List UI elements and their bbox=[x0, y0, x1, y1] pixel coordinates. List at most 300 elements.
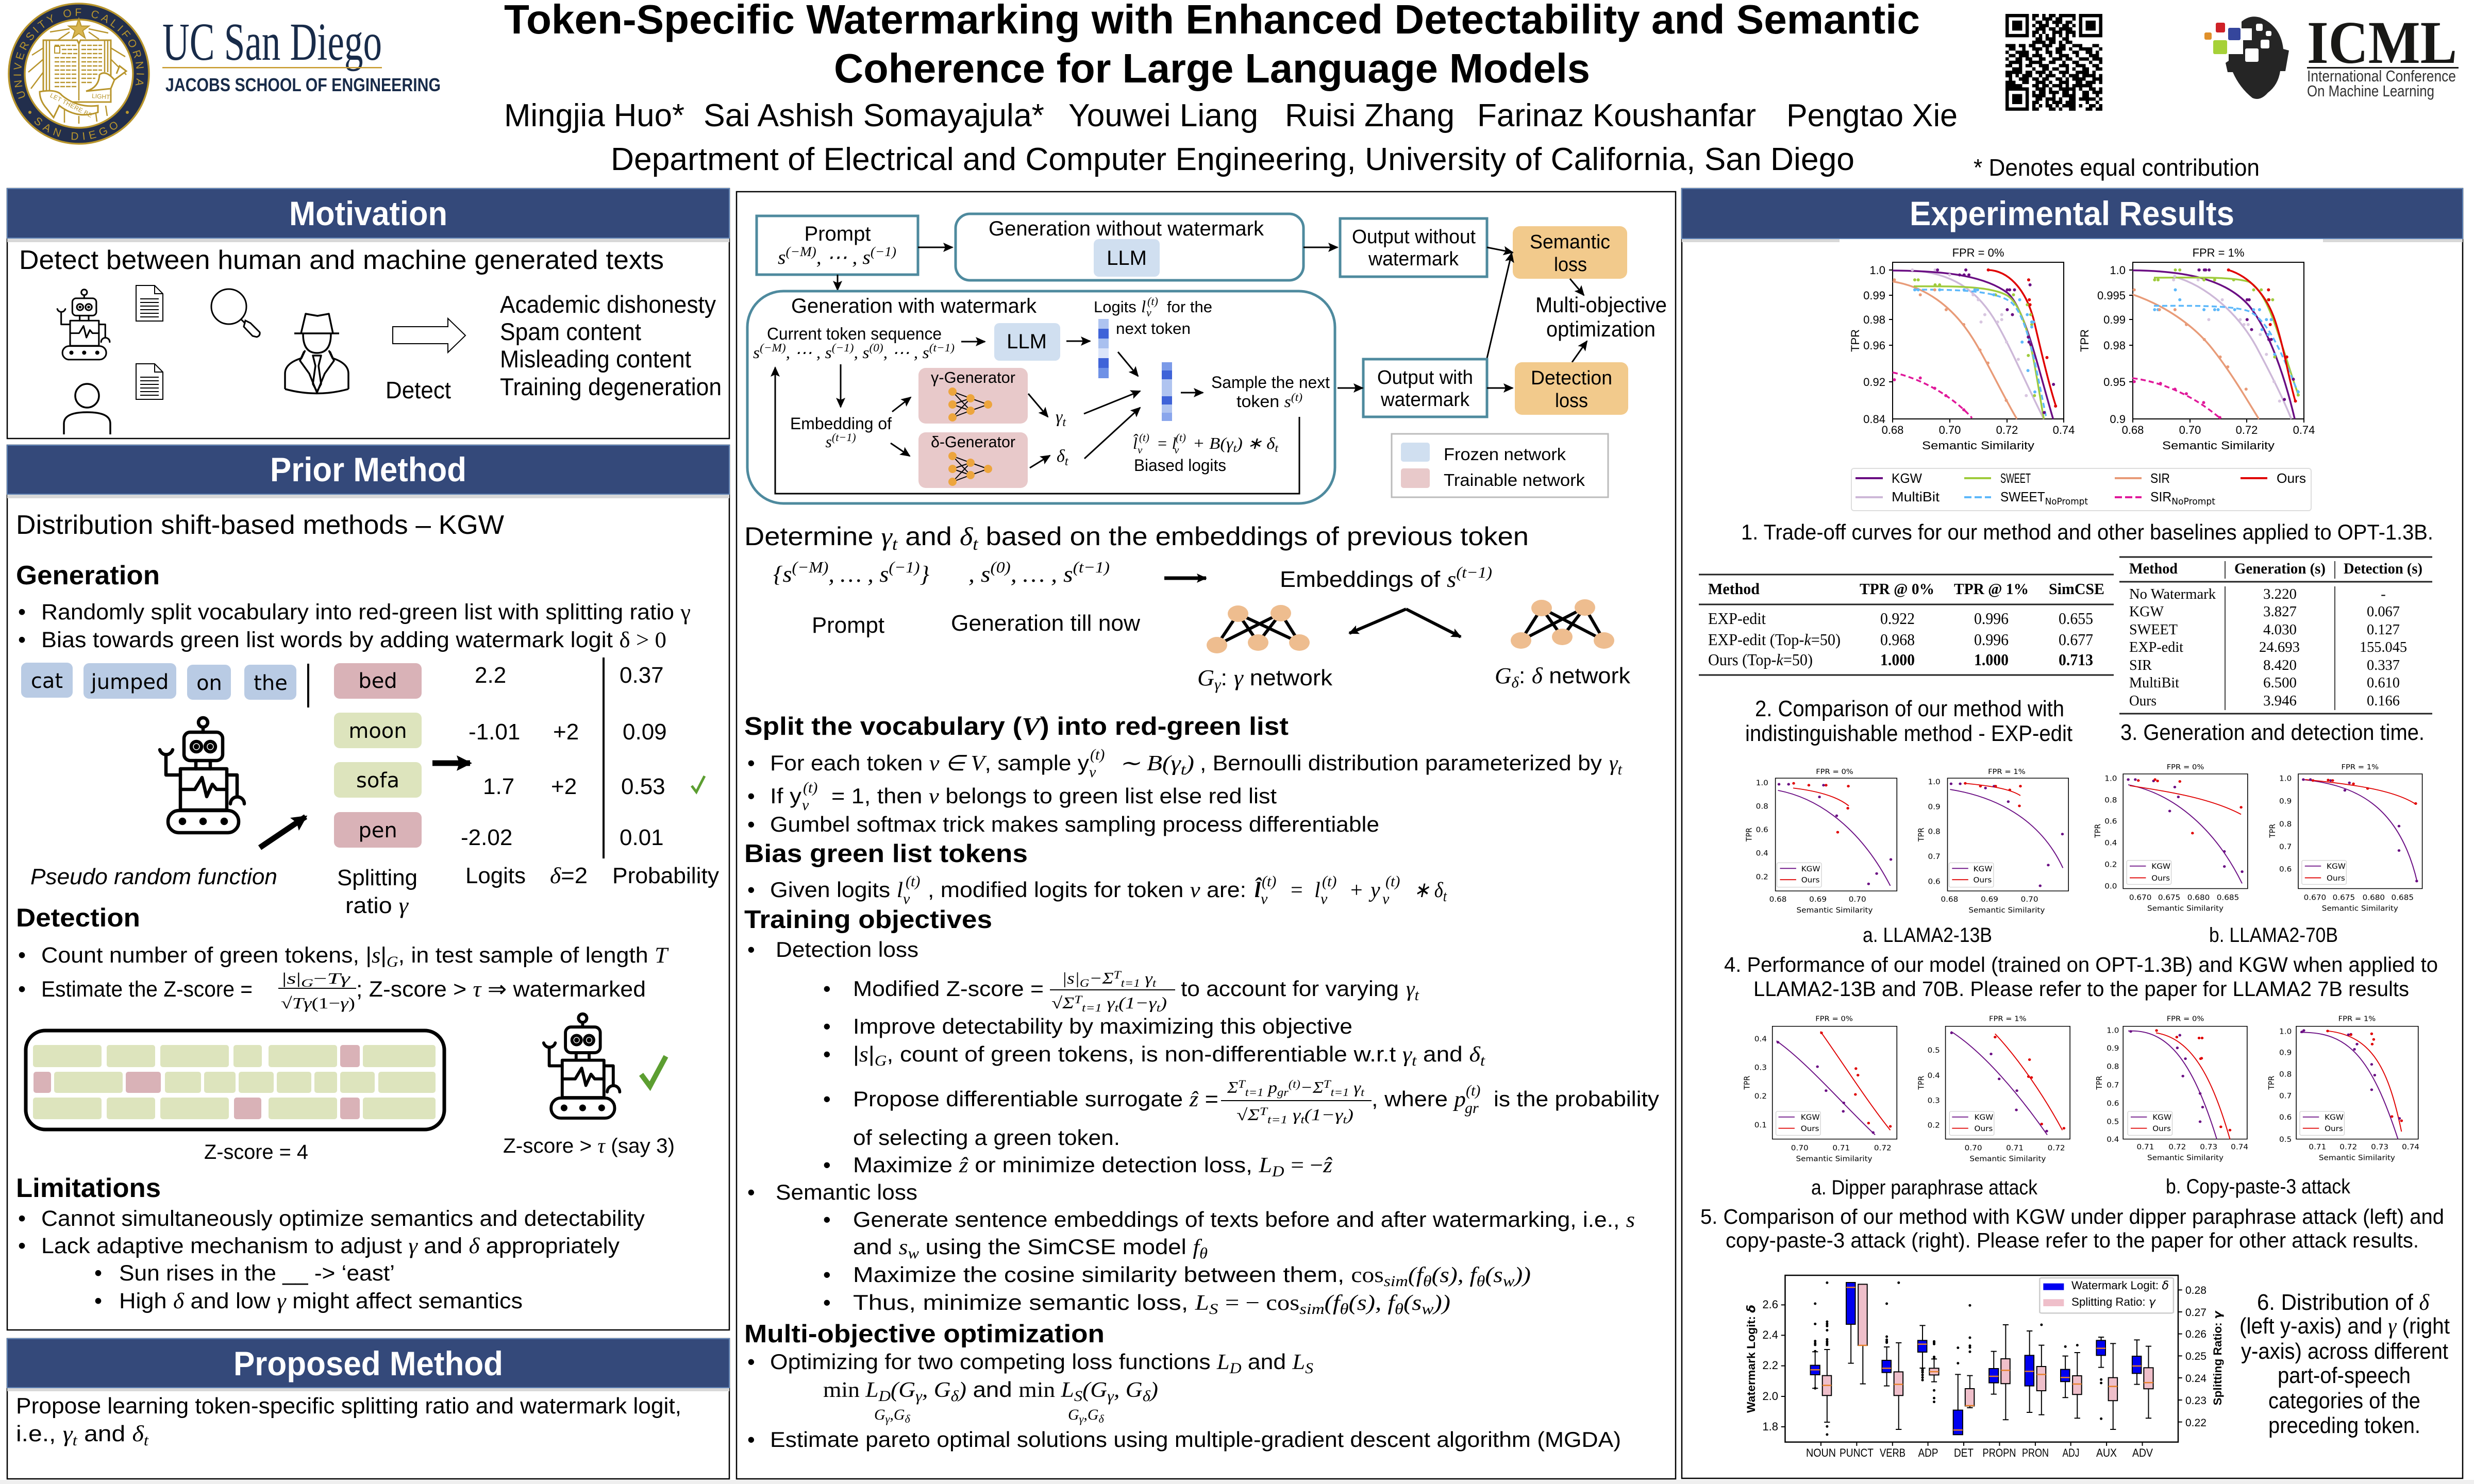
table: generation and detection time: SWEET bbox=[2129, 621, 2178, 638]
affiliation: Department of Electrical and Computer Engineering, University of California, San Diego bbox=[611, 142, 1854, 177]
chart: tradeoff FPR 1: 0.70 bbox=[2179, 424, 2201, 436]
chart: tradeoff FPR 0: Semantic Similarity bbox=[1922, 439, 2034, 452]
chart: LLAMA2-13B FPR 0: Ours bbox=[1801, 876, 1819, 885]
section: training objectives, detection loss: • bbox=[823, 976, 831, 1001]
probability column: 0.53 bbox=[621, 774, 665, 799]
text: multi-objective optimization bbox=[1535, 293, 1667, 341]
arrow: sequence to embedding bbox=[840, 364, 841, 407]
section: training objectives, detection loss: Modified Z-score = bbox=[853, 976, 1044, 1001]
chart: Dipper FPR 1: 0.72 bbox=[2048, 1144, 2065, 1152]
chart: Dipper FPR 1: 0.4 bbox=[1928, 1072, 1940, 1080]
chart: LLAMA2-70B FPR 0: 0.4 bbox=[2104, 839, 2117, 847]
chart: distribution boxplot: 1.8 bbox=[1762, 1420, 1778, 1433]
chart: LLAMA2-13B FPR 0: 0.4 bbox=[1756, 849, 1768, 858]
heading: Proposed Method bbox=[7, 1339, 729, 1388]
section: split the vocabulary: Gumbel softmax trick makes sampling process differentiable bbox=[770, 812, 1379, 836]
chart: Copy-paste FPR 1: 0.7 bbox=[2279, 1092, 2292, 1100]
list: consequences: Academic dishonesty bbox=[500, 291, 716, 318]
chart: tradeoff FPR 1: 0.68 bbox=[2122, 424, 2144, 436]
chart: distribution boxplot: Splitting Ratio: γ bbox=[2071, 1295, 2156, 1309]
caption 5: copy-paste-3 attack (right). Please refer to the paper for other attack results. bbox=[1726, 1228, 2419, 1252]
legend: network types: Frozen network bbox=[1444, 445, 1566, 464]
section: multi-objective optimization: Estimate pareto optimal solutions using multiple-gradient descent algorithm (MGDA) bbox=[770, 1427, 1621, 1452]
chart: LLAMA2-13B FPR 1: 0.70 bbox=[2021, 896, 2038, 904]
table: comparison with EXP-edit: 0.655 bbox=[2059, 609, 2093, 628]
icon: detective bbox=[285, 314, 348, 394]
section: semantic loss: Maximize the cosine similarity between them, cossim(fθ(s), f θ(sw)) bbox=[853, 1262, 1531, 1290]
section: split the vocabulary: Split the vocabulary ( V) into red-green list bbox=[744, 712, 1289, 740]
box: prompt bbox=[757, 216, 918, 275]
chart: Copy-paste FPR 1: 0.72 bbox=[2339, 1143, 2357, 1152]
table: generation and detection time: 0.067 bbox=[2367, 603, 2400, 620]
label: gamma network: Gγ: γ network bbox=[1197, 665, 1333, 693]
labels under generation figure: Pseudo random function bbox=[30, 864, 277, 889]
chart: Copy-paste FPR 0: 0.73 bbox=[2200, 1143, 2217, 1152]
section: training objectives, detection loss: √Σ Tt=1 γt(1−γ t) bbox=[1236, 1105, 1353, 1126]
caption 5 bbox=[1700, 1205, 2444, 1252]
chart: LLAMA2-70B FPR 0 bbox=[2094, 763, 2248, 913]
section: bias green list tokens: l̂ bbox=[1255, 877, 1262, 902]
chart: distribution boxplot: 0.24 bbox=[2185, 1373, 2206, 1385]
table: comparison with EXP-edit: 0.996 bbox=[1974, 609, 2009, 628]
legend: methods: SIR bbox=[2150, 470, 2170, 486]
arrow: robot to tokens bbox=[260, 817, 306, 848]
section: training objectives, detection loss: √Σ Tt=1 γt(1−γ t) bbox=[1051, 993, 1167, 1014]
chart: Copy-paste FPR 0: 0.7 bbox=[2107, 1081, 2119, 1089]
text: proposal: i.e., γt and δt bbox=[16, 1421, 149, 1449]
box: output with watermark: watermark bbox=[1380, 389, 1470, 411]
labels under generation figure bbox=[30, 863, 719, 918]
bullets: detection: ; Z-score > τ ⇒ watermarked bbox=[356, 977, 646, 1002]
sublabels: attacks: b. Copy-paste-3 attack bbox=[2166, 1175, 2351, 1198]
section: bias green list tokens: + bbox=[1350, 879, 1363, 902]
chart: LLAMA2-70B FPR 1: 0.8 bbox=[2279, 820, 2292, 829]
chart: Dipper FPR 1: Ours bbox=[1975, 1125, 1993, 1133]
bullets: generation bbox=[18, 600, 691, 652]
chart: tradeoff FPR 0: 1.0 bbox=[1869, 264, 1885, 277]
formula: biased logits: l̂ bbox=[1133, 434, 1138, 452]
chart: Copy-paste FPR 0: KGW bbox=[2152, 1114, 2172, 1122]
arrow: prompt to generation bbox=[837, 275, 838, 290]
labels under generation figure: Logits bbox=[465, 863, 526, 888]
box: semantic loss: loss bbox=[1554, 254, 1587, 276]
chart: LLAMA2-70B FPR 1: 0.685 bbox=[2392, 893, 2414, 902]
section: training objectives, detection loss: γt bbox=[1406, 977, 1419, 1004]
section: bias green list tokens: (t) bbox=[1262, 873, 1276, 890]
section: bias green list tokens: v bbox=[1320, 890, 1328, 907]
section: semantic loss: Semantic loss bbox=[776, 1180, 917, 1204]
chart: Copy-paste FPR 1: 0.9 bbox=[2279, 1049, 2292, 1057]
section: split the vocabulary: • bbox=[747, 751, 755, 775]
bullets: detection: • bbox=[18, 977, 26, 1002]
section: training objectives, detection loss: Maximize ẑ or minimize detection loss, LD = −ẑ bbox=[853, 1153, 1333, 1180]
list: consequences: Misleading content bbox=[500, 345, 691, 373]
legend: methods: KGW bbox=[1892, 470, 1922, 486]
chart: tradeoff FPR 1: FPR = 1% bbox=[2193, 246, 2244, 259]
chart: LLAMA2-13B FPR 1 bbox=[1917, 768, 2068, 915]
sublabels: models bbox=[1863, 924, 2338, 947]
arrow: to sampling bbox=[1181, 392, 1203, 394]
chart: Dipper FPR 1 bbox=[1917, 1015, 2070, 1163]
logits column: 1.7 bbox=[483, 774, 514, 799]
vector: biased logits bbox=[1162, 362, 1172, 421]
chart: Copy-paste FPR 1: 0.74 bbox=[2402, 1143, 2419, 1152]
table: comparison with EXP-edit: 0.677 bbox=[2059, 630, 2093, 649]
section: multi-objective optimization: min LD(Gγ, Gδ) and min LS(Gγ, Gδ) bbox=[823, 1377, 1158, 1405]
section: training objectives, detection loss: is the probability bbox=[1494, 1087, 1659, 1111]
section: training objectives, detection loss: , where p bbox=[1372, 1087, 1466, 1111]
chart: LLAMA2-70B FPR 0: 0.2 bbox=[2104, 861, 2117, 869]
authors: Sai Ashish Somayajula* bbox=[704, 98, 1044, 133]
caption 6 bbox=[2239, 1290, 2450, 1438]
logo: UC San Diego seal: SAN DIEGO bbox=[35, 117, 118, 140]
title: Coherence for Large Language Models bbox=[834, 45, 1590, 91]
chart: Copy-paste FPR 1: KGW bbox=[2325, 1114, 2344, 1122]
chart: tradeoff FPR 0: 0.99 bbox=[1863, 289, 1885, 302]
logo: UC San Diego seal: UNIVERSITY OF CALIFORNIA bbox=[13, 8, 144, 99]
symbol: gamma t: γt bbox=[1056, 408, 1066, 429]
box: detection loss bbox=[1515, 362, 1628, 415]
label: logits bbox=[1094, 295, 1212, 338]
chart: LLAMA2-13B FPR 0: 0.70 bbox=[1849, 896, 1866, 904]
chart: Dipper FPR 0: TPR bbox=[1743, 1076, 1752, 1090]
delta additions: +2 bbox=[553, 719, 579, 745]
chart: distribution boxplot: Splitting Ratio: γ bbox=[2211, 1310, 2225, 1406]
section: bias green list tokens: v bbox=[903, 890, 910, 907]
heading: Prior Method: Prior Method bbox=[270, 450, 466, 488]
section: split the vocabulary: γt bbox=[1609, 752, 1623, 778]
caption 6: categories of the bbox=[2268, 1388, 2420, 1413]
label: logits: l bbox=[1141, 298, 1146, 316]
formula: biased logits: v bbox=[1174, 444, 1179, 456]
tokens: context: on bbox=[196, 671, 222, 695]
arrow: LLM to logits bbox=[1066, 340, 1090, 342]
chart: Copy-paste FPR 0: 0.74 bbox=[2231, 1143, 2248, 1152]
section: split the vocabulary: v bbox=[802, 797, 809, 814]
arrow: semantic loss to optimization bbox=[1570, 279, 1584, 295]
section: multi-objective optimization: Optimizing for two competing loss functions LD and LS bbox=[770, 1350, 1313, 1377]
table: generation and detection time: 155.045 bbox=[2360, 639, 2407, 655]
chart: tradeoff FPR 1: 0.9 bbox=[2110, 413, 2126, 426]
arrow: embedding to delta generator bbox=[891, 443, 910, 456]
chart: LLAMA2-70B FPR 1: KGW bbox=[2327, 863, 2346, 871]
vector: logits bbox=[1098, 319, 1109, 378]
labels under generation figure: Probability bbox=[612, 863, 719, 888]
arrow: tokens to logits bbox=[432, 761, 470, 766]
chart: tradeoff FPR 0: TPR bbox=[1849, 329, 1862, 352]
table: comparison with EXP-edit: TPR @ 0% bbox=[1860, 580, 1934, 598]
chart: tradeoff FPR 1: 0.995 bbox=[2097, 289, 2126, 302]
section: multi-objective optimization: Multi-objective optimization bbox=[744, 1320, 1105, 1348]
arrow: embedding to gamma generator bbox=[892, 397, 911, 412]
table: generation and detection time: EXP-edit bbox=[2129, 639, 2183, 655]
logo: ICML: ICML bbox=[2307, 9, 2457, 76]
section: semantic loss: Thus, minimize semantic loss, LS = − cos sim(fθ(s), f θ(sw)) bbox=[853, 1290, 1450, 1318]
chart: tradeoff FPR 1: 0.95 bbox=[2103, 376, 2126, 389]
label: delta network: Gδ: δ network bbox=[1495, 663, 1631, 691]
icon: magnifying glass bbox=[211, 289, 260, 337]
bullets: limitations: Sun rises in the __ -> ‘east’ bbox=[119, 1261, 395, 1286]
icon: gamma network bbox=[1207, 605, 1310, 653]
chart: tradeoff FPR 0 bbox=[1849, 246, 2075, 452]
section: training objectives, detection loss: |s|G, count of green tokens, is non-differentiable w.r.t γt and δt bbox=[853, 1042, 1485, 1069]
chart: distribution boxplot: 0.28 bbox=[2185, 1285, 2206, 1296]
logo: UC San Diego seal: LET THERE BE bbox=[49, 92, 93, 119]
caption 2: indistinguishable method - EXP-edit bbox=[1745, 721, 2072, 746]
chart: Copy-paste FPR 0: 0.9 bbox=[2107, 1044, 2119, 1053]
section: split the vocabulary: If y bbox=[770, 784, 801, 808]
subheading: Limitations: Limitations bbox=[16, 1173, 161, 1203]
table: comparison with EXP-edit: 0.922 bbox=[1880, 609, 1915, 628]
chart: Copy-paste FPR 1: 0.73 bbox=[2371, 1143, 2388, 1152]
chart: tradeoff FPR 1: Semantic Similarity bbox=[2162, 439, 2275, 452]
chart: LLAMA2-13B FPR 0: FPR = 0% bbox=[1816, 768, 1853, 776]
chart: tradeoff FPR 0: 0.84 bbox=[1863, 413, 1885, 426]
chart: Dipper FPR 1: FPR = 1% bbox=[1989, 1015, 2027, 1023]
subheading: Generation: Generation bbox=[16, 561, 160, 591]
bullets: detection bbox=[18, 943, 669, 1012]
text: proposal: Propose learning token-specific splitting ratio and watermark logit, bbox=[16, 1393, 681, 1419]
chart: Dipper FPR 1: TPR bbox=[1917, 1076, 1926, 1090]
table: generation and detection time: 3.946 bbox=[2263, 693, 2297, 709]
table: comparison with EXP-edit: Ours (Top-k=50) bbox=[1708, 650, 1813, 669]
chart: LLAMA2-13B FPR 1: 0.7 bbox=[1928, 853, 1941, 861]
chart: distribution boxplot: 2.6 bbox=[1762, 1298, 1778, 1311]
chart: tradeoff FPR 1: 0.99 bbox=[2103, 313, 2126, 326]
section: split the vocabulary: , Bernoulli distribution parameterized by bbox=[1200, 751, 1602, 775]
chart: distribution boxplot: 2.0 bbox=[1762, 1390, 1778, 1403]
section: training objectives, detection loss: of selecting a green token. bbox=[853, 1125, 1120, 1150]
formula: biased logits: = l bbox=[1157, 434, 1177, 452]
chart: Copy-paste FPR 0: 0.71 bbox=[2137, 1143, 2154, 1152]
chart: LLAMA2-13B FPR 1: 0.69 bbox=[1981, 896, 1998, 904]
text: current token sequence bbox=[753, 324, 955, 362]
arrow: output to detection loss bbox=[1487, 387, 1513, 389]
list: consequences: Spam content bbox=[500, 318, 641, 345]
icon: robot bbox=[160, 718, 244, 833]
chart: Copy-paste FPR 0: Ours bbox=[2152, 1125, 2171, 1133]
section: training objectives, detection loss: to account for varying bbox=[1181, 976, 1399, 1001]
panel: Experimental Results bbox=[1682, 189, 2463, 1478]
table: comparison with EXP-edit: Method bbox=[1708, 580, 1760, 598]
chart: Dipper FPR 0: 0.72 bbox=[1874, 1144, 1892, 1152]
chart: distribution boxplot: PRON bbox=[2022, 1446, 2049, 1459]
chart: tradeoff FPR 1: 1.0 bbox=[2110, 264, 2126, 277]
chart: LLAMA2-13B FPR 1: 0.68 bbox=[1941, 896, 1958, 904]
heading: Proposed Method: Proposed Method bbox=[233, 1344, 503, 1382]
chart: tradeoff FPR 0: 0.72 bbox=[1996, 424, 2018, 436]
chart: distribution boxplot: 0.26 bbox=[2185, 1328, 2206, 1340]
box: output without watermark: Output without bbox=[1352, 226, 1476, 248]
text: embedding of previous token: Embedding of bbox=[790, 414, 892, 433]
symbol: delta t: δt bbox=[1057, 447, 1069, 468]
formula: generated tokens: , s(0), … , s (t−1) bbox=[968, 558, 1110, 587]
chart: Dipper FPR 1: 0.3 bbox=[1928, 1097, 1940, 1105]
chart: LLAMA2-70B FPR 0: 1.0 bbox=[2104, 774, 2117, 783]
chart: distribution boxplot: 0.22 bbox=[2185, 1417, 2206, 1429]
table: comparison with EXP-edit: EXP-edit (Top-k=50) bbox=[1708, 630, 1841, 649]
legend: network types: Trainable network bbox=[1444, 470, 1585, 490]
section: training objectives, detection loss: • bbox=[823, 1014, 831, 1038]
bottom shadow strip bbox=[0, 1480, 2474, 1484]
chart: LLAMA2-13B FPR 0: 0.68 bbox=[1769, 896, 1786, 904]
section: bias green list tokens: , modified logits for token v are: bbox=[928, 878, 1246, 902]
figure: token sample box bbox=[26, 1031, 444, 1129]
section: split the vocabulary bbox=[744, 712, 1623, 836]
text: detect between human and machine: Detect between human and machine generated texts bbox=[19, 245, 664, 275]
list: consequences bbox=[500, 291, 722, 400]
arrow: output to semantic loss bbox=[1487, 247, 1513, 252]
chart: LLAMA2-70B FPR 1: 0.680 bbox=[2363, 893, 2385, 902]
chart: Dipper FPR 0: 0.2 bbox=[1754, 1092, 1767, 1101]
chart: LLAMA2-70B FPR 1: 0.675 bbox=[2333, 893, 2355, 902]
chart: Copy-paste FPR 1: 0.6 bbox=[2279, 1114, 2292, 1122]
caption 2 bbox=[1745, 696, 2072, 746]
bullets: detection: • bbox=[18, 943, 26, 968]
section: split the vocabulary: (t) bbox=[803, 779, 817, 796]
chart: Copy-paste FPR 1 bbox=[2267, 1015, 2419, 1162]
section: training objectives, detection loss: |s|G−Σ Tt=1 γt bbox=[1062, 968, 1157, 989]
chart: LLAMA2-13B FPR 1: FPR = 1% bbox=[1988, 768, 2026, 776]
box: output with watermark: Output with bbox=[1377, 367, 1473, 389]
logits column: 2.2 bbox=[475, 663, 506, 688]
chart: LLAMA2-70B FPR 0: 0.680 bbox=[2187, 893, 2210, 902]
text: proposal bbox=[16, 1393, 681, 1449]
bullets: limitations: Cannot simultaneously optimize semantics and detectability bbox=[41, 1206, 645, 1231]
section: training objectives, detection loss: • bbox=[823, 1153, 831, 1177]
tokens: next word candidates bbox=[334, 663, 422, 848]
section: semantic loss: • bbox=[747, 1180, 755, 1204]
section: semantic loss: • bbox=[823, 1207, 831, 1232]
table: generation and detection time: Detection (s) bbox=[2344, 560, 2422, 577]
tokens: next word candidates: moon bbox=[348, 719, 407, 743]
delta additions: +2 bbox=[551, 774, 577, 799]
section: semantic loss: • bbox=[823, 1290, 831, 1314]
chart: tradeoff FPR 0: 0.68 bbox=[1882, 424, 1903, 436]
chart: LLAMA2-13B FPR 1: 1.0 bbox=[1928, 778, 1941, 786]
chart: LLAMA2-70B FPR 1: 0.7 bbox=[2279, 842, 2292, 851]
chart: LLAMA2-70B FPR 1: 1.0 bbox=[2279, 774, 2292, 783]
authors: Youwei Liang bbox=[1068, 98, 1258, 133]
section: training objectives, detection loss: • bbox=[747, 937, 755, 962]
chart: tradeoff FPR 1: 0.98 bbox=[2103, 339, 2126, 352]
chart: Copy-paste FPR 1: Semantic Similarity bbox=[2319, 1154, 2395, 1162]
section: bias green list tokens: v bbox=[1261, 890, 1268, 907]
chart: Copy-paste FPR 0: 0.5 bbox=[2107, 1118, 2119, 1126]
chart: Copy-paste FPR 1: Ours bbox=[2325, 1125, 2343, 1133]
box: LLM bbox=[994, 323, 1060, 361]
bullets: generation: • bbox=[18, 628, 26, 652]
chart: LLAMA2-13B FPR 0: TPR bbox=[1745, 828, 1754, 842]
section: multi-objective optimization: Gγ,Gδ bbox=[874, 1406, 911, 1425]
bullets: limitations: • bbox=[94, 1261, 102, 1286]
chart: LLAMA2-70B FPR 1: 0.9 bbox=[2279, 797, 2292, 805]
logits column: -2.02 bbox=[461, 825, 512, 850]
box: generation without watermark: LLM bbox=[1107, 247, 1147, 269]
chart: LLAMA2-13B FPR 1: Semantic Similarity bbox=[1968, 906, 2045, 915]
chart: Dipper FPR 0: FPR = 0% bbox=[1815, 1015, 1853, 1023]
table: comparison with EXP-edit: SimCSE bbox=[2049, 580, 2104, 598]
arrow: gamma generator output bbox=[1028, 394, 1048, 417]
bullets: generation: Randomly split vocabulary into red-green list with splitting ratio γ bbox=[41, 600, 691, 625]
caption 6: (left y-axis) and γ (right bbox=[2239, 1313, 2450, 1339]
section: bias green list tokens: ∗ δt bbox=[1414, 879, 1447, 905]
chart: distribution boxplot: 2.4 bbox=[1762, 1328, 1778, 1341]
sublabels: models: b. LLAMA2-70B bbox=[2209, 924, 2338, 947]
table: generation and detection time: 0.610 bbox=[2367, 674, 2400, 691]
chart: LLAMA2-70B FPR 0: 0.670 bbox=[2129, 893, 2151, 902]
box: detection loss: loss bbox=[1555, 390, 1588, 412]
caption 4: LLAMA2-13B and 70B. Please refer to the paper for LLAMA2 7B results bbox=[1753, 977, 2409, 1001]
section: split the vocabulary: • bbox=[747, 812, 755, 836]
section: bias green list tokens: Given logits l bbox=[770, 878, 903, 902]
table: generation and detection time: 24.693 bbox=[2259, 639, 2300, 655]
section: training objectives, detection loss: Propose differentiable surrogate ẑ = bbox=[853, 1087, 1218, 1111]
chart: Copy-paste FPR 1: TPR bbox=[2267, 1076, 2276, 1090]
table: generation and detection time: 3.827 bbox=[2263, 603, 2297, 620]
table: generation and detection time: KGW bbox=[2129, 603, 2164, 620]
QR code bbox=[2005, 14, 2102, 111]
icon: document from human bbox=[136, 364, 163, 399]
icon: large check bbox=[641, 1056, 666, 1086]
arrow: prompt to LLM bbox=[918, 246, 952, 248]
panel: Prior Method bbox=[7, 445, 729, 1330]
chart: Copy-paste FPR 0: 0.8 bbox=[2107, 1063, 2119, 1071]
bullets: limitations: • bbox=[18, 1234, 26, 1258]
chart: LLAMA2-13B FPR 0: 0.6 bbox=[1756, 826, 1768, 834]
bullets: detection: Estimate the Z-score = bbox=[41, 977, 253, 1002]
logo: ICML bbox=[2204, 9, 2459, 100]
authors: Farinaz Koushanfar bbox=[1477, 98, 1756, 133]
table: comparison with EXP-edit: TPR @ 1% bbox=[1954, 580, 2029, 598]
chart: tradeoff FPR 0: 0.98 bbox=[1863, 313, 1885, 326]
formula: biased logits: v bbox=[1138, 444, 1143, 456]
probability column bbox=[620, 663, 667, 850]
table: generation and detection time: Method bbox=[2129, 560, 2178, 577]
subheading: Detection: Detection bbox=[16, 903, 140, 932]
chart: Dipper FPR 0: 0.71 bbox=[1832, 1144, 1850, 1152]
bullets: limitations: High δ and low γ might affect semantics bbox=[119, 1289, 523, 1313]
chart: LLAMA2-70B FPR 0: 0.675 bbox=[2158, 893, 2180, 902]
bullets: generation: Bias towards green list words by adding watermark logit δ > 0 bbox=[41, 628, 666, 652]
box: delta generator: δ-Generator bbox=[931, 433, 1015, 451]
table: comparison with EXP-edit: 0.713 bbox=[2059, 650, 2093, 669]
bullets: limitations: • bbox=[18, 1206, 26, 1231]
chart: tradeoff FPR 1: TPR bbox=[2078, 329, 2091, 352]
chart: distribution boxplot: ADV bbox=[2132, 1446, 2153, 1459]
table: comparison with EXP-edit: 1.000 bbox=[1974, 650, 2009, 669]
chart: LLAMA2-13B FPR 0: 0.2 bbox=[1756, 873, 1768, 881]
chart: Copy-paste FPR 1: FPR = 1% bbox=[2338, 1015, 2376, 1023]
label: detect: Detect bbox=[386, 377, 451, 403]
logo: UC San Diego wordmark: UC San Diego bbox=[162, 12, 382, 72]
arrow: LLM to output bbox=[1303, 246, 1338, 248]
delta additions bbox=[551, 719, 579, 799]
box: gamma generator bbox=[918, 368, 1028, 424]
chart: distribution boxplot: Watermark Logit: δ bbox=[2071, 1279, 2169, 1292]
legend: methods: MultiBit bbox=[1892, 489, 1940, 504]
section: semantic loss: and sw using the SimCSE model fθ bbox=[853, 1235, 1208, 1262]
caption 6: 6. Distribution of δ bbox=[2257, 1290, 2430, 1315]
label: embeddings: Embeddings of s(t−1) bbox=[1280, 563, 1492, 592]
chart: distribution boxplot: ADJ bbox=[2063, 1446, 2079, 1459]
labels under generation figure: Splitting bbox=[337, 865, 417, 890]
section: split the vocabulary: • bbox=[747, 784, 755, 808]
arrow: delta generator output bbox=[1030, 456, 1050, 468]
section: bias green list tokens: Bias green list tokens bbox=[744, 840, 1028, 868]
caption 1: 1. Trade-off curves for our method and other baselines applied to OPT-1.3B. bbox=[1741, 520, 2433, 544]
bullets: detection: √Tγ (1− γ) bbox=[281, 994, 355, 1012]
